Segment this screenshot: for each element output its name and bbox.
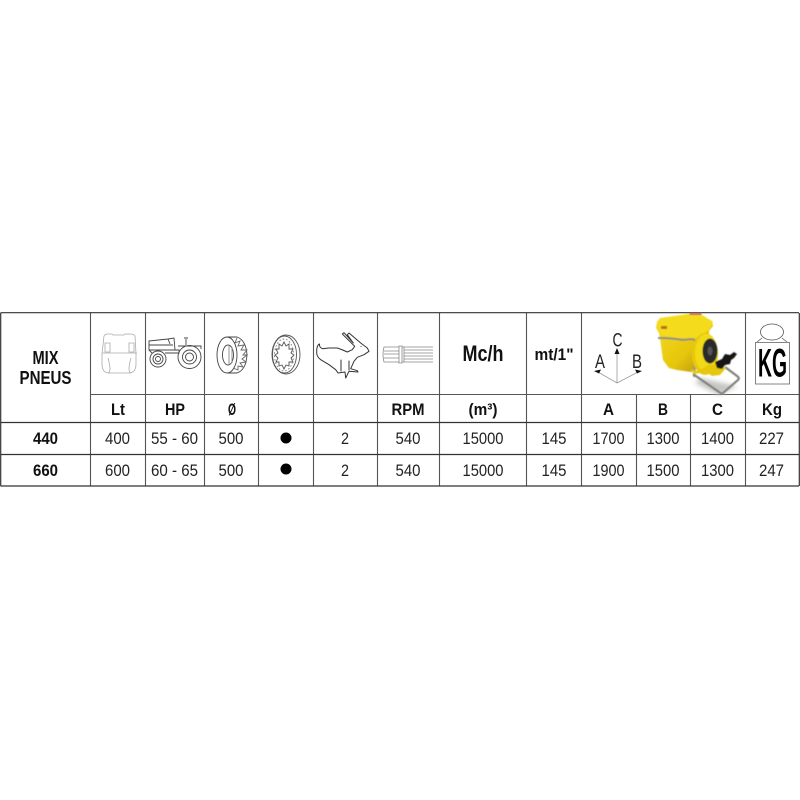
row: model 440: 500 bbox=[218, 430, 244, 448]
units row bbox=[111, 400, 782, 419]
row: model 660: 1500 bbox=[646, 462, 680, 480]
units row: B bbox=[658, 400, 668, 419]
row: model 660: 500 bbox=[218, 462, 244, 480]
row: model 440: 1400 bbox=[701, 430, 734, 448]
row: model 440: 1300 bbox=[646, 430, 680, 448]
row: model 660: 600 bbox=[105, 462, 130, 480]
dimensions diagram: A bbox=[595, 352, 605, 373]
heading: model name: MIX bbox=[32, 348, 58, 368]
units row: HP bbox=[165, 400, 185, 419]
row: model 440: 15000 bbox=[462, 430, 504, 448]
dimensions diagram bbox=[594, 330, 642, 383]
row: model 440: 227 bbox=[759, 430, 784, 448]
row: model 660: 145 bbox=[542, 462, 566, 480]
row: model 440 bbox=[33, 430, 784, 448]
units row: (m³) bbox=[468, 400, 498, 419]
units row: A bbox=[603, 400, 614, 419]
units row: Ø bbox=[228, 400, 236, 419]
units row: Lt bbox=[111, 400, 125, 419]
row: model 440: 2 bbox=[341, 430, 349, 448]
row: model 660 bbox=[33, 462, 784, 480]
icon: tank bbox=[102, 334, 137, 373]
row: model 440: 1700 bbox=[592, 430, 624, 448]
icon: tractor bbox=[149, 338, 201, 368]
row: model 440: 400 bbox=[105, 430, 130, 448]
row: model 660: 540 bbox=[396, 462, 420, 480]
row: model 440: 440 bbox=[33, 430, 58, 448]
row: model 660: 660 bbox=[33, 462, 58, 480]
row: model 660: 2 bbox=[341, 462, 349, 480]
heading: jet distance: mt/1" bbox=[534, 346, 574, 364]
heading: air flow: Mc/h bbox=[462, 341, 504, 366]
row: model 440: 540 bbox=[396, 430, 420, 448]
dimensions diagram: C bbox=[612, 330, 622, 352]
row: model 660: 1900 bbox=[592, 462, 624, 480]
icon: PTO shaft bbox=[383, 346, 433, 363]
machine photo: yellow sprayer bbox=[656, 313, 739, 395]
icon: weight KG bbox=[756, 324, 790, 386]
heading: model name: PNEUS bbox=[20, 368, 72, 388]
units row: C bbox=[712, 400, 723, 419]
icon: gear disc bbox=[272, 335, 300, 374]
row: model 440: 145 bbox=[542, 430, 566, 448]
row: model 660: 247 bbox=[759, 462, 784, 480]
row: model 660: 1300 bbox=[701, 462, 734, 480]
row: model 660: 60 - 65 bbox=[151, 462, 198, 480]
row: model 440: 55 - 60 bbox=[151, 430, 198, 448]
icon: running rabbit bbox=[317, 333, 369, 378]
units row: RPM bbox=[392, 400, 424, 419]
heading: model name bbox=[20, 348, 72, 388]
units row: Kg bbox=[762, 400, 782, 419]
icon: tyre bbox=[217, 337, 247, 373]
dimensions diagram: B bbox=[632, 352, 642, 373]
row: model 660: 15000 bbox=[462, 462, 504, 480]
